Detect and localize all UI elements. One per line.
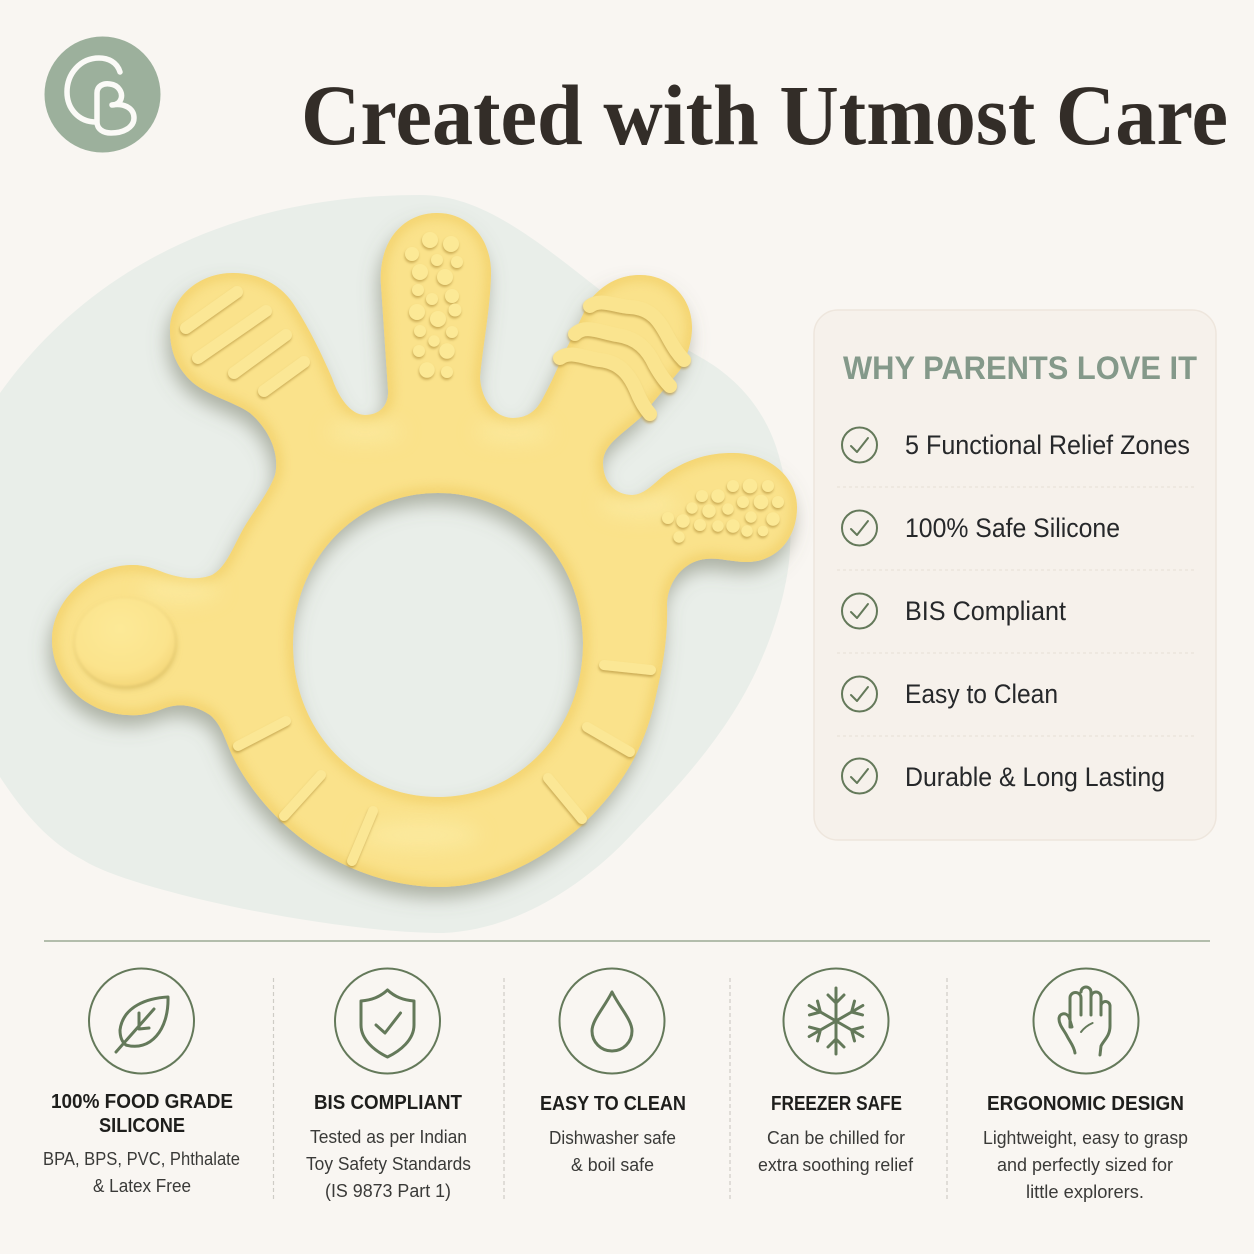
finger 2 dots — [405, 232, 463, 378]
list item: BIS compliant — [842, 594, 1066, 628]
feature: ergonomic design: Lightweight, easy to grasp — [983, 1127, 1188, 1148]
feature: BIS compliant: Toy Safety Standards — [306, 1153, 471, 1174]
feature: freezer safe: extra soothing relief — [758, 1154, 914, 1175]
icon: water drop — [560, 968, 664, 1074]
list item: durable and long lasting — [842, 758, 1165, 794]
list item: 100% safe silicone: 100% Safe Silicone — [905, 513, 1120, 543]
feature: food grade silicone: 100% FOOD GRADE — [51, 1090, 233, 1113]
feature: freezer safe: FREEZER SAFE — [771, 1092, 902, 1115]
feature: food grade silicone: BPA, BPS, PVC, Phthalate — [43, 1148, 240, 1169]
feature: BIS compliant — [306, 968, 471, 1201]
feature: ergonomic design: ERGONOMIC DESIGN — [987, 1092, 1184, 1115]
finger 1 straight ridges — [186, 292, 304, 391]
feature: food grade silicone — [43, 968, 240, 1196]
body shading — [52, 213, 797, 887]
list item: durable and long lasting: Durable & Long Lasting — [905, 762, 1165, 792]
icon: leaf — [89, 968, 194, 1074]
teether product — [52, 213, 797, 887]
feature: food grade silicone: SILICONE — [99, 1114, 185, 1137]
feature: freezer safe — [758, 968, 914, 1175]
icon: hand — [1034, 968, 1138, 1074]
logo: CB monogram — [44, 36, 160, 152]
feature: freezer safe: Can be chilled for — [767, 1127, 905, 1148]
list item: BIS compliant: BIS Compliant — [905, 596, 1066, 626]
feature: easy to clean: & boil safe — [571, 1154, 654, 1175]
list item: easy to clean: Easy to Clean — [905, 679, 1058, 709]
feature: easy to clean — [540, 968, 686, 1175]
feature: ergonomic design — [983, 968, 1188, 1202]
feature: BIS compliant: (IS 9873 Part 1) — [325, 1180, 451, 1201]
finger 4 dots — [662, 479, 784, 543]
feature: BIS compliant: Tested as per Indian — [310, 1126, 467, 1147]
list item: 5 functional relief zones — [842, 428, 1190, 462]
feature: BIS compliant: BIS COMPLIANT — [314, 1091, 462, 1114]
feature: easy to clean: EASY TO CLEAN — [540, 1092, 686, 1115]
ring ridges — [238, 665, 651, 861]
feature: easy to clean: Dishwasher safe — [549, 1127, 676, 1148]
panel heading: WHY PARENTS LOVE IT — [843, 350, 1197, 386]
list item: easy to clean — [842, 676, 1058, 712]
feature: ergonomic design: little explorers. — [1026, 1181, 1144, 1202]
feature: ergonomic design: and perfectly sized for — [997, 1154, 1173, 1175]
list item: 5 functional relief zones: 5 Functional Relief Zones — [905, 430, 1190, 460]
list item: 100% safe silicone — [842, 510, 1120, 546]
teether body — [52, 213, 797, 887]
title: Created with Utmost Care — [301, 67, 1228, 163]
icon: shield — [335, 968, 440, 1074]
panel: why parents love it — [814, 310, 1216, 840]
feature: food grade silicone: & Latex Free — [93, 1175, 191, 1196]
icon: snowflake — [784, 968, 888, 1074]
left knob bump — [75, 598, 175, 686]
background sage blob — [0, 195, 791, 933]
finger 3 wavy ridges — [560, 302, 684, 414]
